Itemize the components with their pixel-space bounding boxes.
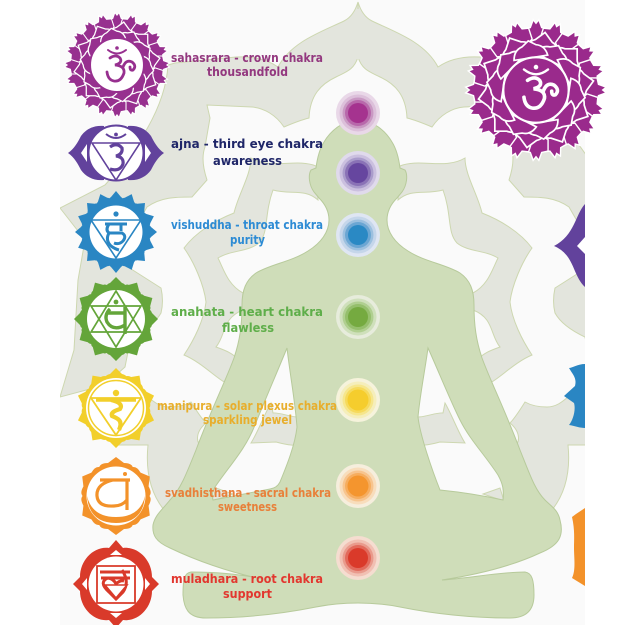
label: svadhisthana: sweetness (218, 500, 277, 514)
icon: anahata heart, left (74, 277, 158, 361)
icon: partial svadhisthana petals, right edge (572, 508, 585, 586)
label: ajna: awareness (213, 154, 282, 168)
label: anahata (171, 305, 323, 335)
body chakra: third eye (336, 151, 380, 195)
label: sahasrara: sahasrara - crown chakra (171, 51, 323, 65)
icon: partial vishuddha petals, right edge (564, 364, 585, 428)
label: vishuddha (171, 218, 323, 247)
icon: sahasrara crown lotus, right (465, 19, 607, 161)
label: vishuddha: purity (230, 233, 265, 247)
label: svadhisthana: svadhisthana - sacral chakra (165, 486, 331, 500)
lotus petal background (60, 2, 625, 510)
icon: svadhisthana sacral, left (74, 457, 158, 535)
icon: muladhara root, left (73, 540, 159, 625)
body chakra: crown (336, 91, 380, 135)
icon: sahasrara crown lotus, left (64, 12, 170, 118)
seated body silhouette (153, 120, 561, 618)
label: manipura: sparkling jewel (203, 413, 292, 427)
label: anahata: anahata - heart chakra (171, 305, 323, 319)
body chakra: throat (336, 213, 380, 257)
icon: manipura solar plexus, left (75, 368, 157, 448)
label: ajna (171, 137, 323, 168)
icon: ajna third eye, left (68, 126, 164, 180)
label: sahasrara: thousandfold (207, 65, 288, 79)
icon: partial ajna petal, right edge (554, 204, 585, 287)
body chakra: heart (336, 295, 380, 339)
label: manipura (157, 399, 337, 427)
body chakra: sacral (336, 464, 380, 508)
label: sahasrara (171, 51, 323, 79)
icon: vishuddha throat, left (75, 191, 157, 273)
label: muladhara (171, 572, 323, 601)
body chakra: solar plexus (336, 378, 380, 422)
label: muladhara: muladhara - root chakra (171, 572, 323, 586)
label: muladhara: support (223, 587, 272, 601)
label: manipura: manipura - solar plexus chakra (157, 399, 337, 413)
label: ajna: ajna - third eye chakra (171, 137, 323, 151)
body chakra: root (336, 536, 380, 580)
label: anahata: flawless (222, 321, 274, 335)
label: svadhisthana (165, 486, 331, 514)
label: vishuddha: vishuddha - throat chakra (171, 218, 323, 232)
